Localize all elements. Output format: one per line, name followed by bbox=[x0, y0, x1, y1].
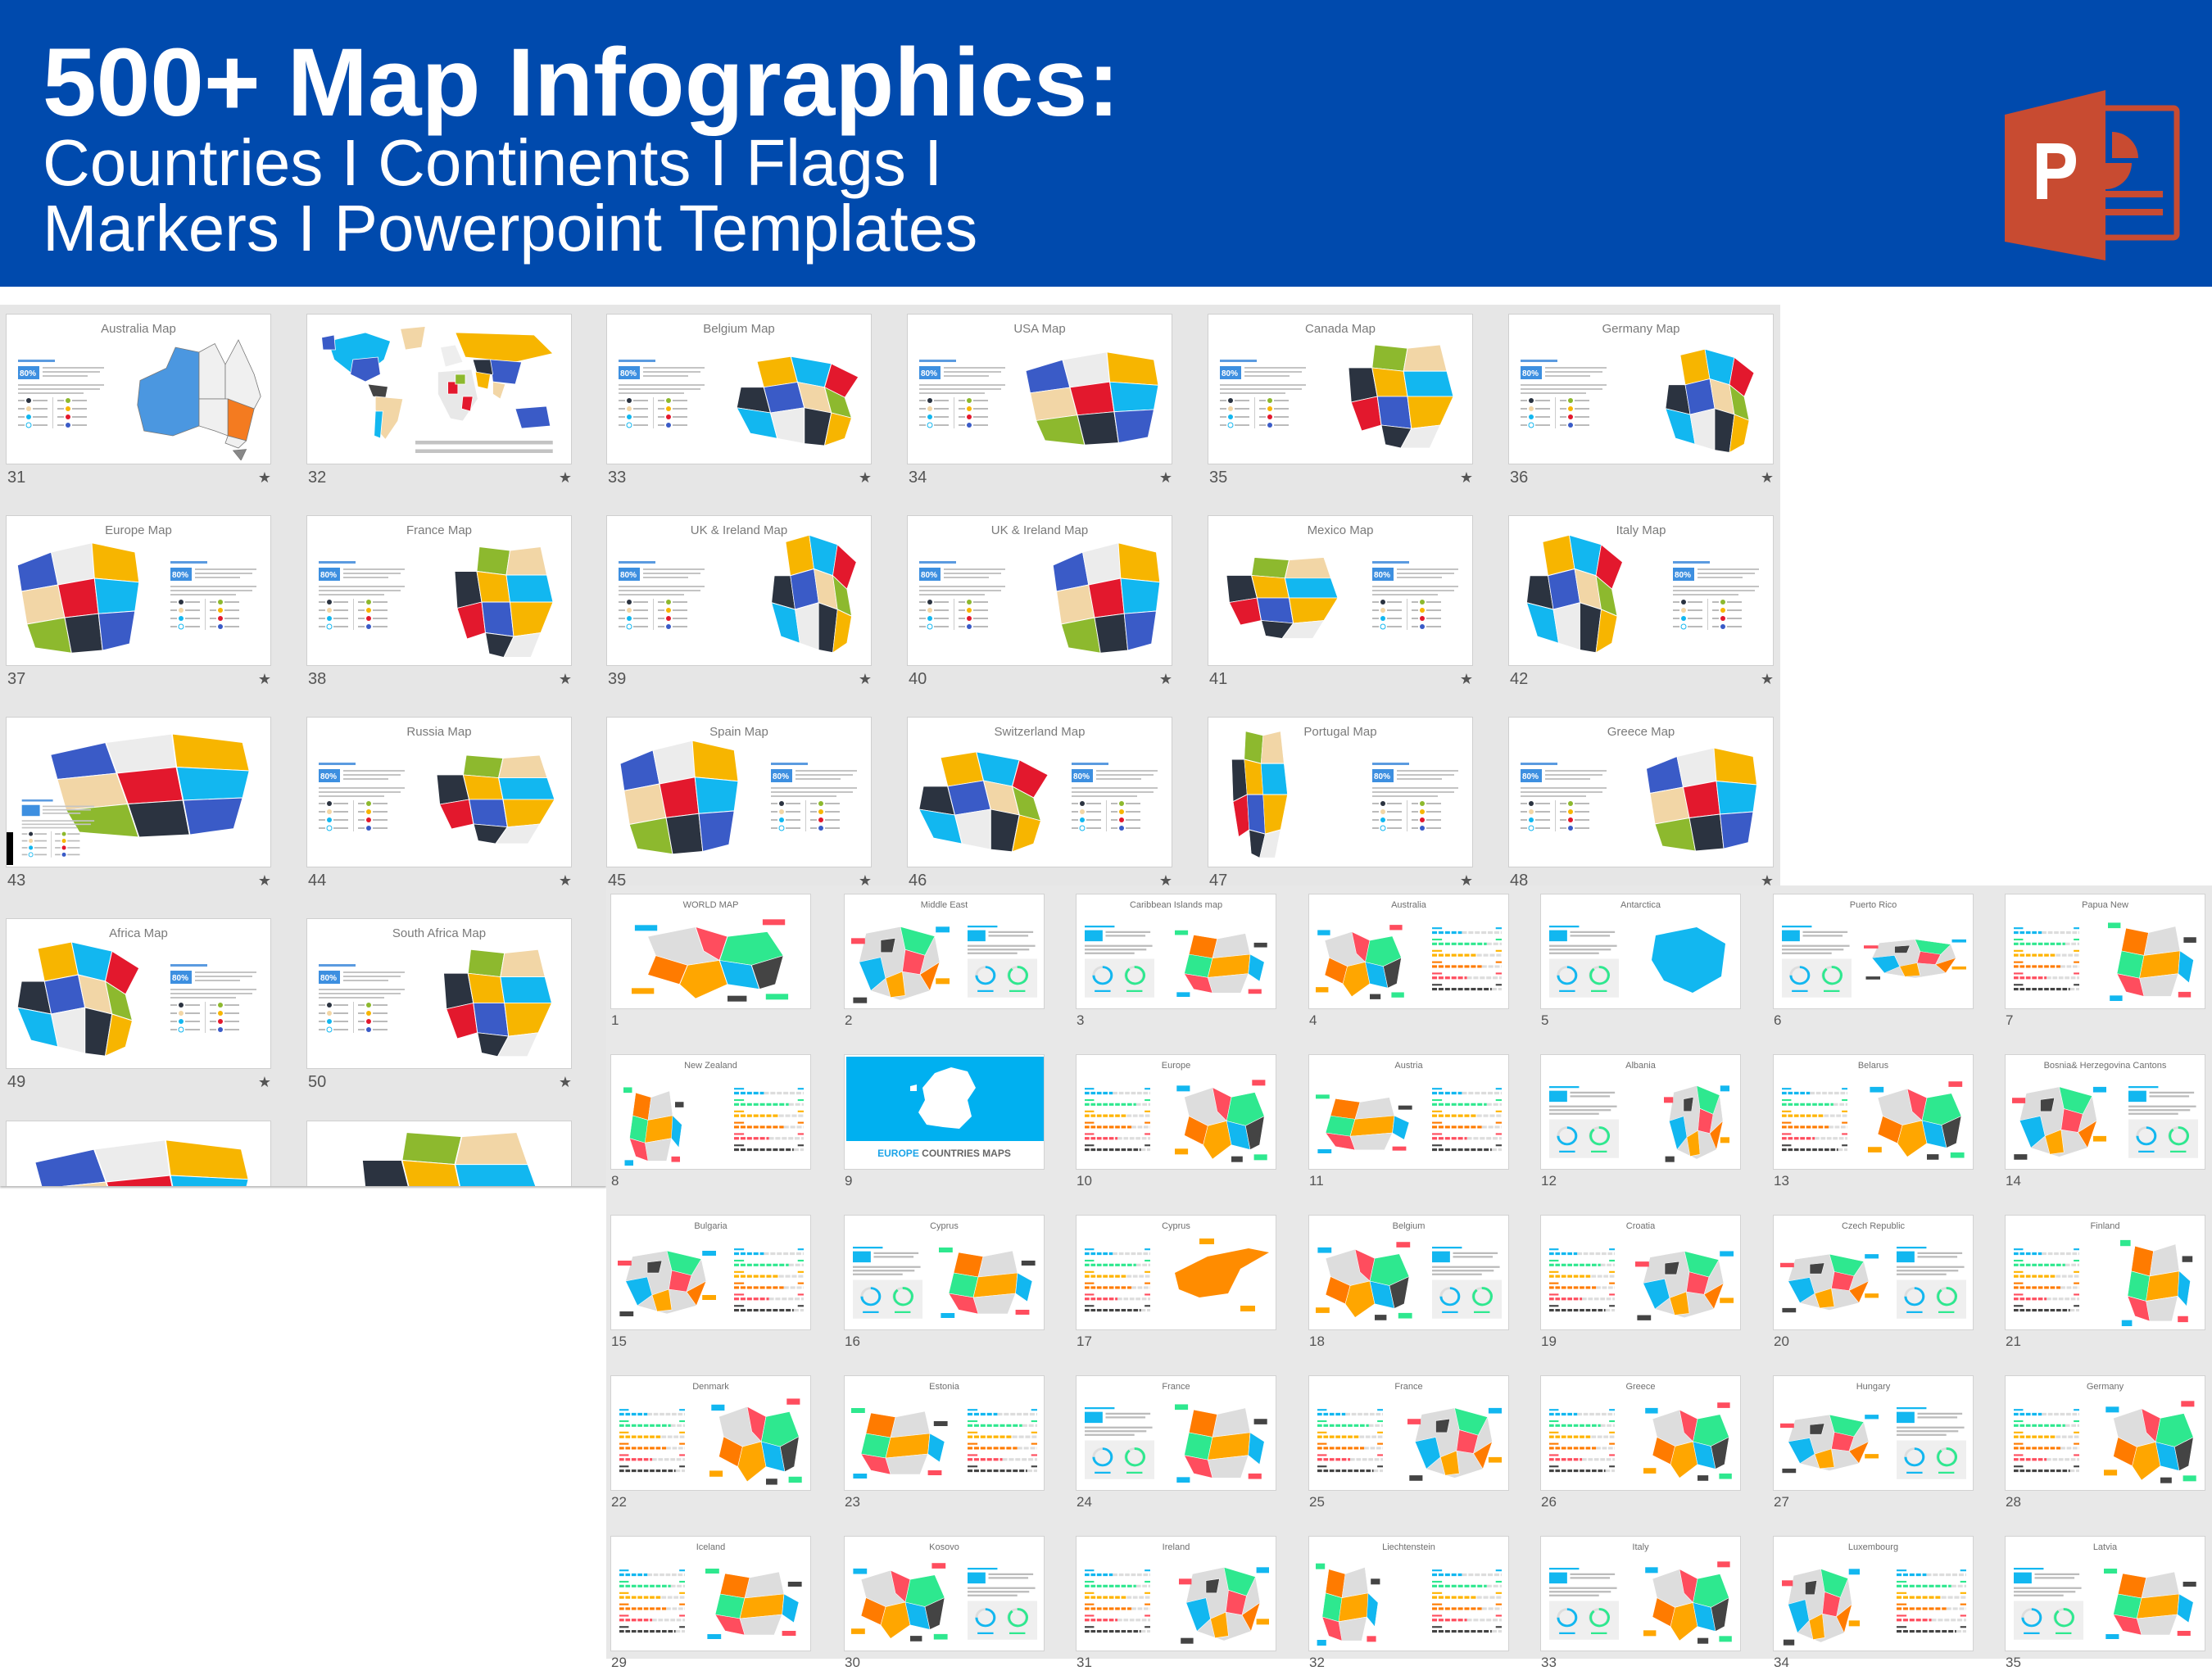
slide 31: Australia Map: Australia Map bbox=[101, 322, 176, 336]
slide 47: Portugal Map bbox=[1208, 717, 1473, 867]
number 29: 29 bbox=[611, 1655, 627, 1670]
number 40 bbox=[909, 670, 1172, 688]
bottom slide 33: Italy bbox=[1540, 1536, 1741, 1651]
slide 38: France Map: 80% bbox=[320, 571, 337, 580]
number 24: 24 bbox=[1077, 1494, 1092, 1510]
slide 48: Greece Map: Greece Map bbox=[1607, 725, 1675, 739]
bottom slide 21: Finland: Finland bbox=[2090, 1221, 2120, 1231]
slide 36: Germany Map: 80% bbox=[1522, 369, 1539, 378]
slide 41: Mexico Map: 80% bbox=[1374, 571, 1390, 580]
number 45: 45 bbox=[608, 872, 626, 890]
number 31: ★ bbox=[258, 469, 271, 486]
number 22: 22 bbox=[611, 1494, 627, 1510]
number 35: 35 bbox=[2006, 1655, 2021, 1670]
number 4: 4 bbox=[1309, 1012, 1317, 1028]
number 38: ★ bbox=[559, 671, 572, 687]
number 32 bbox=[308, 469, 572, 487]
slide 35: Canada Map bbox=[1208, 314, 1473, 464]
slide 44: Russia Map bbox=[306, 717, 572, 867]
bottom slide 30: Kosovo bbox=[844, 1536, 1045, 1651]
number 23: 23 bbox=[845, 1494, 860, 1510]
number 46 bbox=[909, 872, 1172, 890]
number 3: 3 bbox=[1077, 1012, 1084, 1028]
slide 42: Italy Map: Italy Map bbox=[1616, 523, 1666, 537]
bottom slide 18: Belgium bbox=[1308, 1215, 1509, 1330]
number 5: 5 bbox=[1541, 1012, 1548, 1028]
number 15: 15 bbox=[611, 1334, 627, 1349]
bottom slide 15: Bulgaria: Bulgaria bbox=[694, 1221, 728, 1231]
bottom slide 5: Antarctica: Antarctica bbox=[1620, 900, 1661, 910]
number 45: ★ bbox=[859, 872, 872, 889]
slide 38: France Map: France Map bbox=[406, 523, 472, 537]
slide 50: South Africa Map bbox=[306, 918, 572, 1069]
number 37: ★ bbox=[258, 671, 271, 687]
bottom slide 27: Hungary: Hungary bbox=[1856, 1382, 1890, 1392]
number 47 bbox=[1209, 872, 1473, 890]
bottom slide 3: Caribbean Islands map: Caribbean Islands map bbox=[1130, 900, 1222, 910]
bottom slide 17: Cyprus: Cyprus bbox=[1162, 1221, 1190, 1231]
number 34 bbox=[909, 469, 1172, 487]
bottom slide 11: Austria bbox=[1308, 1054, 1509, 1170]
slide 33: Belgium Map bbox=[606, 314, 872, 464]
number 27: 27 bbox=[1774, 1494, 1789, 1510]
bottom slide 15: Bulgaria bbox=[610, 1215, 811, 1330]
slide 43: map with legend bbox=[6, 717, 271, 867]
bottom slide 4: Australia bbox=[1308, 894, 1509, 1009]
number 11: 11 bbox=[1309, 1173, 1324, 1189]
number 50: 50 bbox=[308, 1073, 326, 1091]
slide 39: UK & Ireland Map: UK & Ireland Map bbox=[691, 523, 787, 537]
slide 31: Australia Map bbox=[6, 314, 271, 464]
panel: bottom slide grid background bbox=[606, 885, 2212, 1659]
slide 44: Russia Map: 80% bbox=[320, 772, 337, 781]
slide 40: UK & Ireland Map bbox=[907, 515, 1172, 666]
number 33: 33 bbox=[1541, 1655, 1557, 1670]
number 21: 21 bbox=[2006, 1334, 2021, 1349]
number 31: 31 bbox=[7, 469, 25, 487]
bottom slide 28: Germany: Germany bbox=[2087, 1382, 2124, 1392]
bottom slide 1: WORLD MAP: WORLD MAP bbox=[683, 900, 738, 910]
number 19: 19 bbox=[1541, 1334, 1557, 1349]
subtitle bbox=[43, 126, 977, 265]
bottom slide 30: Kosovo: Kosovo bbox=[929, 1542, 959, 1552]
bottom slide 24: France bbox=[1076, 1375, 1276, 1491]
panel: lower left slide grid background bbox=[0, 885, 606, 1186]
number 20: 20 bbox=[1774, 1334, 1789, 1349]
number 36 bbox=[1510, 469, 1774, 487]
bottom slide 13: Belarus: Belarus bbox=[1858, 1061, 1888, 1071]
number 2: 2 bbox=[845, 1012, 852, 1028]
number 50: ★ bbox=[559, 1074, 572, 1090]
slide 49: Africa Map: 80% bbox=[172, 974, 188, 983]
bottom slide 19: Croatia bbox=[1540, 1215, 1741, 1330]
bottom slide 10: Europe bbox=[1076, 1054, 1276, 1170]
bottom slide 2: Middle East bbox=[844, 894, 1045, 1009]
number 1: 1 bbox=[611, 1012, 619, 1028]
bottom slide 1: WORLD MAP bbox=[610, 894, 811, 1009]
number 25: 25 bbox=[1309, 1494, 1325, 1510]
number 32: 32 bbox=[308, 469, 326, 487]
bottom slide 20: Czech Republic: Czech Republic bbox=[1842, 1221, 1905, 1231]
bottom slide 31: Ireland bbox=[1076, 1536, 1276, 1651]
slide 31: Australia Map: 80% bbox=[20, 369, 36, 378]
slide 33: Belgium Map: Belgium Map bbox=[703, 322, 775, 336]
number 42 bbox=[1510, 670, 1774, 688]
slide 34: USA Map bbox=[907, 314, 1172, 464]
slide 50: South Africa Map: South Africa Map bbox=[392, 926, 486, 940]
bottom slide 17: Cyprus bbox=[1076, 1215, 1276, 1330]
bottom slide 32: Liechtenstein: Liechtenstein bbox=[1382, 1542, 1435, 1552]
number 44: ★ bbox=[559, 872, 572, 889]
number 12: 12 bbox=[1541, 1173, 1557, 1189]
number 42: ★ bbox=[1761, 671, 1774, 687]
slide 47: Portugal Map: Portugal Map bbox=[1303, 725, 1377, 739]
bottom slide 23: Estonia: Estonia bbox=[929, 1382, 959, 1392]
bottom slide 25: France: France bbox=[1394, 1382, 1423, 1392]
bottom slide 28: Germany bbox=[2005, 1375, 2205, 1491]
number 39 bbox=[608, 670, 872, 688]
number 46: 46 bbox=[909, 872, 927, 890]
number 32: ★ bbox=[559, 469, 572, 486]
number 37 bbox=[7, 670, 271, 688]
bottom slide 7: Papua New: Papua New bbox=[2082, 900, 2128, 910]
number 44 bbox=[308, 872, 572, 890]
bottom slide 3: Caribbean Islands map bbox=[1076, 894, 1276, 1009]
slide 48: Greece Map: 80% bbox=[1522, 772, 1539, 781]
number 49 bbox=[7, 1073, 271, 1091]
slide 48: Greece Map bbox=[1508, 717, 1774, 867]
header banner bbox=[0, 0, 2212, 287]
number 33 bbox=[608, 469, 872, 487]
bottom slide 22: Denmark bbox=[610, 1375, 811, 1491]
slide 50: South Africa Map: 80% bbox=[320, 974, 337, 983]
bottom slide 25: France bbox=[1308, 1375, 1509, 1491]
slide 37: Europe Map: 80% bbox=[172, 571, 188, 580]
number 40: 40 bbox=[909, 670, 927, 688]
number 30: 30 bbox=[845, 1655, 860, 1670]
number 9: 9 bbox=[845, 1173, 852, 1189]
slide 36: Germany Map bbox=[1508, 314, 1774, 464]
bottom slide 12: Albania bbox=[1540, 1054, 1741, 1170]
bottom slide 29: Iceland bbox=[610, 1536, 811, 1651]
slide 35: Canada Map: Canada Map bbox=[1305, 322, 1376, 336]
slide 32: world map bbox=[306, 314, 572, 464]
bottom slide 19: Croatia: Croatia bbox=[1626, 1221, 1655, 1231]
bottom slide 7: Papua New bbox=[2005, 894, 2205, 1009]
bottom slide 9: Europe Countries Maps: EUROPE COUNTRIES MAPS bbox=[877, 1148, 1011, 1159]
slide 34: USA Map: 80% bbox=[921, 369, 937, 378]
bottom slide 23: Estonia bbox=[844, 1375, 1045, 1491]
bottom slide 21: Finland bbox=[2005, 1215, 2205, 1330]
bottom slide 14: Bosnia& Herzegovina Cantons bbox=[2005, 1054, 2205, 1170]
number 49: 49 bbox=[7, 1073, 25, 1091]
bottom slide 35: Latvia bbox=[2005, 1536, 2205, 1651]
number 41: ★ bbox=[1460, 671, 1473, 687]
number 50 bbox=[308, 1073, 572, 1091]
bottom slide 8: New Zealand: New Zealand bbox=[684, 1061, 737, 1071]
bottom slide 9: Europe Countries Maps bbox=[844, 1054, 1045, 1170]
number 35: ★ bbox=[1460, 469, 1473, 486]
bottom slide 12: Albania: Albania bbox=[1625, 1061, 1656, 1071]
bottom slide 26: Greece bbox=[1540, 1375, 1741, 1491]
number 18: 18 bbox=[1309, 1334, 1325, 1349]
number 26: 26 bbox=[1541, 1494, 1557, 1510]
slide 40: UK & Ireland Map: UK & Ireland Map bbox=[991, 523, 1088, 537]
slide 39: UK & Ireland Map bbox=[606, 515, 872, 666]
number 37: 37 bbox=[7, 670, 25, 688]
number 34: 34 bbox=[909, 469, 927, 487]
number 40: ★ bbox=[1159, 671, 1172, 687]
number 31 bbox=[7, 469, 271, 487]
bottom slide 29: Iceland: Iceland bbox=[696, 1542, 725, 1552]
bottom slide 8: New Zealand bbox=[610, 1054, 811, 1170]
number 7: 7 bbox=[2006, 1012, 2013, 1028]
bottom slide 31: Ireland: Ireland bbox=[1163, 1542, 1190, 1552]
number 36: ★ bbox=[1761, 469, 1774, 486]
slide 46: Switzerland Map: 80% bbox=[1073, 772, 1090, 781]
slide 46: Switzerland Map bbox=[907, 717, 1172, 867]
number 48: ★ bbox=[1761, 872, 1774, 889]
bottom slide 20: Czech Republic bbox=[1773, 1215, 1974, 1330]
number 44: 44 bbox=[308, 872, 326, 890]
bottom slide 35: Latvia: Latvia bbox=[2093, 1542, 2117, 1552]
number 39: ★ bbox=[859, 671, 872, 687]
number 10: 10 bbox=[1077, 1173, 1092, 1189]
number 8: 8 bbox=[611, 1173, 619, 1189]
number 34: 34 bbox=[1774, 1655, 1789, 1670]
bottom slide 18: Belgium: Belgium bbox=[1393, 1221, 1425, 1231]
slide 45: Spain Map: Spain Map bbox=[709, 725, 768, 739]
number 34: ★ bbox=[1159, 469, 1172, 486]
slide 37: Europe Map: Europe Map bbox=[105, 523, 172, 537]
slide 35: Canada Map: 80% bbox=[1222, 369, 1238, 378]
number 36: 36 bbox=[1510, 469, 1528, 487]
bottom slide 13: Belarus bbox=[1773, 1054, 1974, 1170]
bottom slide 16: Cyprus bbox=[844, 1215, 1045, 1330]
bottom slide 2: Middle East: Middle East bbox=[921, 900, 968, 910]
number 35: 35 bbox=[1209, 469, 1227, 487]
slide 41: Mexico Map: Mexico Map bbox=[1308, 523, 1373, 537]
slide 37: Europe Map bbox=[6, 515, 271, 666]
slide 45: Spain Map bbox=[606, 717, 872, 867]
bottom slide 14: Bosnia& Herzegovina Cantons: Bosnia& Herzegovina Cantons bbox=[2044, 1061, 2166, 1071]
icon: powerpoint logo bbox=[2005, 90, 2179, 260]
number 33: 33 bbox=[608, 469, 626, 487]
slide 36: Germany Map: Germany Map bbox=[1602, 322, 1680, 336]
number 38: 38 bbox=[308, 670, 326, 688]
bottom slide 24: France: France bbox=[1162, 1382, 1190, 1392]
partial slides row (cut off) bbox=[6, 1121, 572, 1186]
number 14: 14 bbox=[2006, 1173, 2021, 1189]
bottom slide 26: Greece: Greece bbox=[1625, 1382, 1656, 1392]
number 33: ★ bbox=[859, 469, 872, 486]
number 41 bbox=[1209, 670, 1473, 688]
bottom slide 34: Luxembourg bbox=[1773, 1536, 1974, 1651]
bottom slide 22: Denmark: Denmark bbox=[692, 1382, 729, 1392]
number 48 bbox=[1510, 872, 1774, 890]
number 43: 43 bbox=[7, 872, 25, 890]
number 39: 39 bbox=[608, 670, 626, 688]
number 38 bbox=[308, 670, 572, 688]
bottom slide 10: Europe: Europe bbox=[1162, 1061, 1190, 1071]
bottom slide 4: Australia: Australia bbox=[1391, 900, 1426, 910]
slide 47: Portugal Map: 80% bbox=[1374, 772, 1390, 781]
number 49: ★ bbox=[258, 1074, 271, 1090]
slide 34: USA Map: USA Map bbox=[1013, 322, 1066, 336]
bottom slide 33: Italy: Italy bbox=[1632, 1542, 1649, 1552]
number 48: 48 bbox=[1510, 872, 1528, 890]
subtitle: Countries I Continents I Flags I bbox=[43, 126, 942, 199]
slide 49: Africa Map: Africa Map bbox=[109, 926, 168, 940]
slide 42: Italy Map bbox=[1508, 515, 1774, 666]
slide 44: Russia Map: Russia Map bbox=[406, 725, 472, 739]
number 46: ★ bbox=[1159, 872, 1172, 889]
number 6: 6 bbox=[1774, 1012, 1781, 1028]
title: 500+ Map Infographics: bbox=[43, 29, 1120, 137]
bottom slide 34: Luxembourg: Luxembourg bbox=[1848, 1542, 1898, 1552]
number 41: 41 bbox=[1209, 670, 1227, 688]
bottom slide 6: Puerto Rico: Puerto Rico bbox=[1850, 900, 1897, 910]
number 42: 42 bbox=[1510, 670, 1528, 688]
slide 38: France Map bbox=[306, 515, 572, 666]
bottom slide 16: Cyprus: Cyprus bbox=[930, 1221, 959, 1231]
number 47: 47 bbox=[1209, 872, 1227, 890]
subtitle: Markers I Powerpoint Templates bbox=[43, 192, 977, 265]
bottom slide 6: Puerto Rico bbox=[1773, 894, 1974, 1009]
bottom slide 32: Liechtenstein bbox=[1308, 1536, 1509, 1651]
number 31: 31 bbox=[1077, 1655, 1092, 1670]
number 45 bbox=[608, 872, 872, 890]
bottom slide 5: Antarctica bbox=[1540, 894, 1741, 1009]
slide 45: Spain Map: 80% bbox=[773, 772, 789, 781]
number 47: ★ bbox=[1460, 872, 1473, 889]
bottom slide 11: Austria: Austria bbox=[1394, 1061, 1423, 1071]
number 16: 16 bbox=[845, 1334, 860, 1349]
panel: top slide grid background bbox=[0, 305, 1780, 885]
slide 46: Switzerland Map: Switzerland Map bbox=[995, 725, 1085, 739]
bottom slide 27: Hungary bbox=[1773, 1375, 1974, 1491]
slide 42: Italy Map: 80% bbox=[1675, 571, 1691, 580]
slide 39: UK & Ireland Map: 80% bbox=[620, 571, 637, 580]
number 35 bbox=[1209, 469, 1473, 487]
number 43: ★ bbox=[258, 872, 271, 889]
number 28: 28 bbox=[2006, 1494, 2021, 1510]
number 17: 17 bbox=[1077, 1334, 1092, 1349]
number 32: 32 bbox=[1309, 1655, 1325, 1670]
number 13: 13 bbox=[1774, 1173, 1789, 1189]
slide 33: Belgium Map: 80% bbox=[620, 369, 637, 378]
slide 49: Africa Map bbox=[6, 918, 271, 1069]
slide 40: UK & Ireland Map: 80% bbox=[921, 571, 937, 580]
slide 41: Mexico Map bbox=[1208, 515, 1473, 666]
number 43 bbox=[7, 872, 271, 890]
